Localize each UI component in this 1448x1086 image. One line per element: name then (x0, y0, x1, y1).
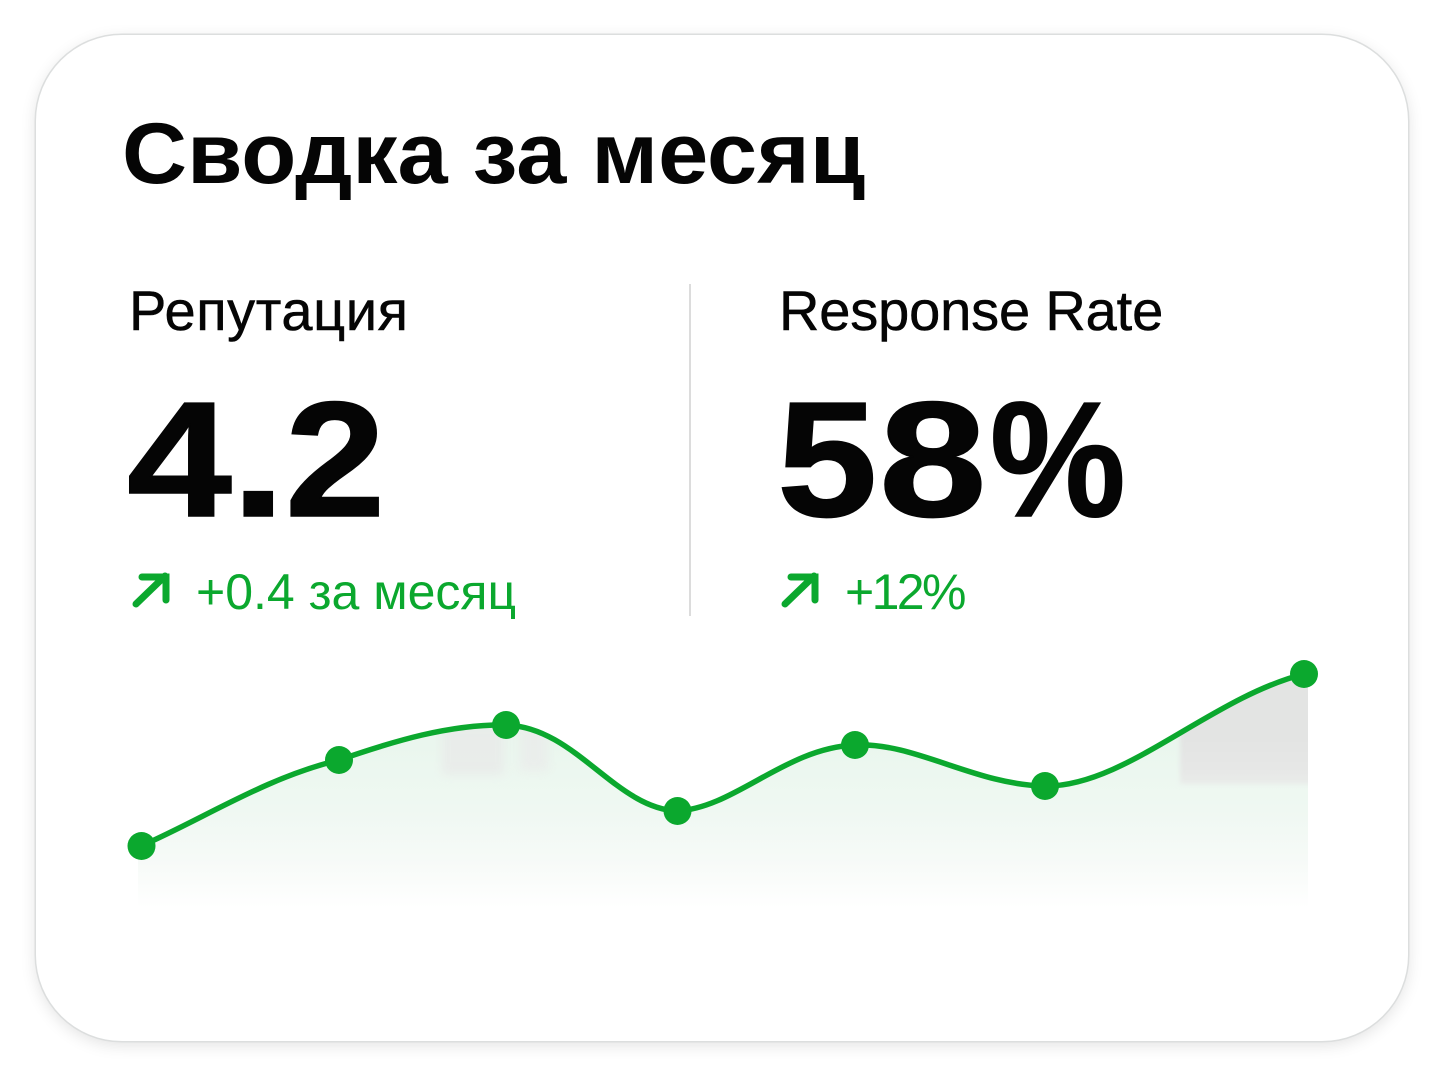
chart line (141, 674, 1304, 846)
value: response rate: 5 (777, 368, 877, 551)
title: Сводка за месяц (122, 106, 865, 202)
value: response rate: % (990, 368, 1126, 551)
chart points (128, 660, 1318, 860)
value: reputation: 2 (285, 368, 385, 551)
line chart (128, 660, 1318, 864)
icon: up arrow reputation (132, 572, 170, 608)
label: reputation: Репутация (129, 279, 409, 342)
change: response rate: +12% (845, 564, 964, 620)
chart area fill (138, 680, 1308, 864)
value: reputation: 4 (127, 368, 232, 551)
icon: up arrow response rate (782, 572, 818, 608)
divider (689, 284, 691, 616)
value: reputation: . (231, 368, 286, 551)
value: response rate: 8 (879, 368, 987, 551)
label: response rate: Response Rate (779, 279, 1163, 342)
change: reputation: +0.4 за месяц (196, 564, 516, 620)
